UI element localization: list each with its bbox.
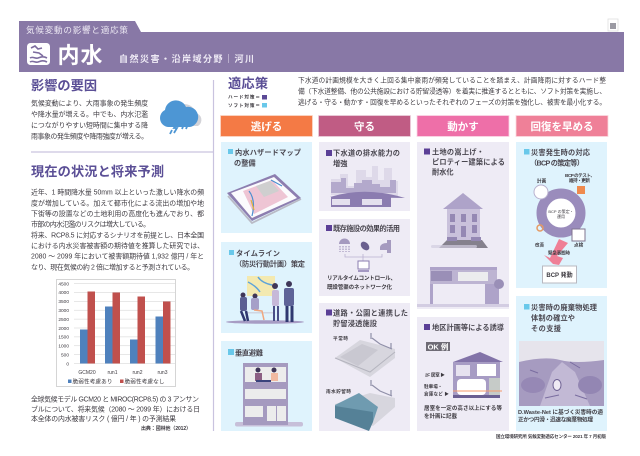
column header: protect: 守る (354, 120, 375, 133)
source note: 出典：國林他（2012） (141, 425, 191, 432)
panel: storage facilities: 平常時 (333, 335, 348, 342)
label: OK example: OK 例 (428, 342, 449, 352)
panel: raised land (417, 142, 509, 309)
text block: adaptation intro (298, 76, 606, 106)
header banner (19, 21, 624, 72)
panel: BCP: 計画 (537, 178, 547, 184)
icon: flooded person (27, 43, 50, 65)
bar chart: flood damage risk: 3500 (58, 299, 69, 305)
legend: hard and soft measures: ハード対策＝ (228, 94, 260, 100)
icon: piloti building (417, 267, 509, 307)
header banner: 内水 (58, 43, 102, 68)
panel: district planning: 居室を一定の高さ以上にする等 (424, 404, 502, 412)
panel: BCP: 維持・更新 (569, 177, 590, 184)
panel: district planning: 地区計画等による誘導 (432, 323, 504, 332)
heading: adaptation: 適応策 (228, 75, 268, 91)
text block: current situation: 2080 ～ 2099 年において被害額期待値 1,932 億円 / 年と (31, 252, 204, 260)
bar chart: flood damage risk: GCM20 (78, 370, 96, 376)
footer credit: 国立環境研究所 気候変動適応センター 2021 年 7 月初版 (496, 433, 606, 440)
text block: causes: 雨事象の発生頻度や降雨強度が増える。 (31, 132, 148, 140)
diagram: BCP cycle: BCP の策定・ (548, 208, 574, 214)
panel: raised land: 土地の嵩上げ・ (432, 148, 484, 156)
panel: BCP: 点検 (574, 242, 584, 248)
panel: BCP: 緊急事態時 (548, 250, 570, 256)
panel: BCP: （BCP の策定等） (530, 158, 584, 168)
legend: hard and soft measures (228, 94, 267, 109)
panel: hazard map: の整備 (234, 158, 256, 168)
column header: recover (516, 116, 608, 136)
heading: current situation: 現在の状況と将来予測 (31, 163, 164, 179)
column header: recover: 回復を早める (530, 120, 594, 133)
panel: BCP: 改善 (535, 242, 545, 248)
panel: sewer capacity: 増強 (333, 159, 348, 168)
panel: district planning: 倉庫など ▶ (424, 390, 449, 398)
panel: district planning: 2F 居室 ▶ (425, 372, 445, 378)
panel: district planning (417, 317, 509, 431)
panel: raised land: ピロティー建築による (432, 158, 505, 166)
bar chart: flood damage risk: 3000 (58, 308, 69, 314)
icon: storing state facility (335, 380, 395, 431)
panel: storage facilities: 道路・公園と連携した (333, 308, 408, 318)
panel: raised land: 耐水化 (432, 168, 454, 176)
box: BCP activation: BCP 発動 (546, 271, 573, 279)
column header: move (417, 116, 509, 136)
panel: disaster waste: 正かつ円滑・迅速な廃棄物処理 (518, 416, 593, 424)
column header: protect (318, 116, 410, 136)
text block: current situation: 下街等の設置などの土地利用の高度化も進んでおり、都 (31, 209, 204, 218)
panel: BCP (516, 142, 607, 288)
panel: storage facilities: 雨水貯留時 (326, 388, 351, 395)
bar chart: flood damage risk: 2000 (58, 326, 69, 332)
bar chart: flood damage risk: 1000 (58, 344, 69, 350)
diagram: BCP cycle: 運用 (557, 213, 565, 219)
bar chart: flood damage risk: 4000 (58, 290, 69, 296)
chart legend: 脆弱性考慮あり (72, 378, 112, 386)
icon: city and pipes (330, 166, 405, 207)
text block: causes: につながりやすい短時間に集中する降 (31, 120, 148, 130)
icon: building with people (235, 363, 303, 426)
bar chart: flood damage risk: 0 (66, 361, 69, 367)
arrow: emergency (544, 239, 568, 265)
icon: meeting people (226, 276, 304, 324)
legend: hard and soft measures: ソフト対策＝ (228, 102, 260, 109)
text block: current situation: なり、現在気候の約 2 倍に増加すると予測されている。 (31, 262, 194, 272)
panel: existing facilities: 既存施設の効果的活用 (333, 224, 400, 233)
panel: timeline (221, 242, 312, 333)
panel: existing facilities: 既設管渠のネットワーク化 (327, 283, 392, 291)
divider (31, 80, 214, 431)
bar chart: flood damage risk: 2500 (58, 317, 69, 323)
bar chart: flood damage risk: run2 (132, 370, 143, 376)
panel: storage facilities: 貯留浸透施設 (333, 319, 378, 328)
diagram: house with ground floor parking (453, 352, 503, 398)
illustration: debris (519, 341, 604, 406)
text block: current situation: における内水災害被害額の期待値を推算した研究では、 (31, 241, 204, 250)
bar chart: flood damage risk (56, 280, 176, 386)
text block: current situation (31, 188, 204, 272)
column header: move: 動かす (447, 120, 479, 133)
chart legend (68, 378, 165, 386)
column header: escape: 逃げる (251, 120, 282, 133)
panel: storage facilities (319, 303, 410, 431)
panel: hazard map (221, 142, 312, 233)
panel: disaster waste: D.Waste-Net に基づく災害時の適 (518, 408, 603, 416)
chart legend: 脆弱性考慮なし (124, 378, 165, 386)
text block: causes: や降水量が増える。中でも、内水氾濫 (31, 110, 148, 118)
text block: adaptation intro: 逃げる・守る・動かす・回復を早めるといったそれぞれのフェーズの対策を強化し、被害を最小化する。 (298, 98, 606, 106)
chart caption: ブルについて、将来気候（2080 ～ 2099 年）における日 (31, 404, 200, 414)
panel: existing facilities: リアルタイムコントロール、 (327, 274, 396, 282)
panel: timeline: タイムライン (236, 249, 280, 258)
panel: sewer capacity: 下水道の排水能力の (333, 148, 400, 158)
panel: district planning: を計画に記載 (424, 412, 457, 420)
text block: current situation: 度が増加している。加えて都市化による流出の増加や地 (31, 198, 204, 208)
header banner: 気候変動の影響と適応策 (26, 24, 128, 35)
text block: current situation: 近年、1 時間降水量 50mm 以上といった激しい降水の頻 (31, 188, 204, 196)
bar chart: flood damage risk: run1 (107, 370, 118, 376)
chart caption (31, 394, 200, 423)
panel: BCP: BCP のテスト、 (565, 173, 595, 179)
panel: disaster waste: 災害時の廃棄物処理 (531, 303, 597, 312)
panel: district planning: 駐車場・ (424, 383, 442, 390)
panel: disaster waste: その支援 (531, 324, 562, 333)
heading: causes: 影響の要因 (31, 77, 97, 93)
text block: causes (31, 98, 148, 140)
header banner: 自然災害・沿岸域分野｜河川 (119, 53, 254, 64)
icon: raised house (431, 193, 488, 248)
panel: vertical evacuation (221, 341, 312, 431)
chart caption: 本全体の内水被害リスク ( 億円 / 年 ) の予測結果 (31, 414, 176, 423)
panel: existing facilities (319, 219, 410, 296)
panel: disaster waste (516, 296, 607, 431)
panel: hazard map: 内水ハザードマップ (235, 148, 302, 157)
text block: adaptation intro: 下水道の計画規模を大きく上回る集中豪雨が頻発していることを踏まえ、計画降雨に対するハード整 (298, 76, 606, 84)
bar chart: flood damage risk: run3 (157, 370, 168, 376)
chart caption: 全球気候モデル GCM20 と MIROC(RCP8.5) の 3 アンサン (31, 394, 199, 404)
icon: normal state facility (335, 333, 395, 377)
panel: timeline: （防災行動計画）策定 (235, 260, 305, 268)
diagram: BCP cycle (534, 185, 585, 241)
column header: escape (220, 116, 312, 136)
box: BCP activation (542, 266, 576, 283)
panel: vertical evacuation: 垂直避難 (235, 348, 263, 358)
corner tag icon (608, 19, 618, 31)
text block: causes: 気候変動により、大雨事象の発生頻度 (31, 98, 148, 108)
bar chart: flood damage risk: 1500 (58, 335, 69, 341)
icon: monitoring network (339, 238, 391, 271)
icon: map (227, 174, 301, 223)
bar chart: flood damage risk: 500 (61, 352, 69, 358)
panel: BCP: 災害発生時の対応 (531, 148, 591, 157)
panel: sewer capacity (319, 142, 410, 211)
bar chart: flood damage risk: 4500 (58, 281, 69, 287)
text block: adaptation intro: 備（下水道整備、他の公共施設における貯留浸透等）を着実に推進するとともに、ソフト対策を実施し、 (298, 86, 606, 96)
icon: rain cloud (160, 100, 201, 134)
text block: current situation: 将来、RCP8.5 に対応するシナリオを前提とし、日本全国 (31, 230, 204, 240)
text block: current situation: 市部の内水氾濫のリスクは増大している。 (31, 220, 150, 228)
panel: disaster waste: 体制の確立や (531, 314, 575, 322)
